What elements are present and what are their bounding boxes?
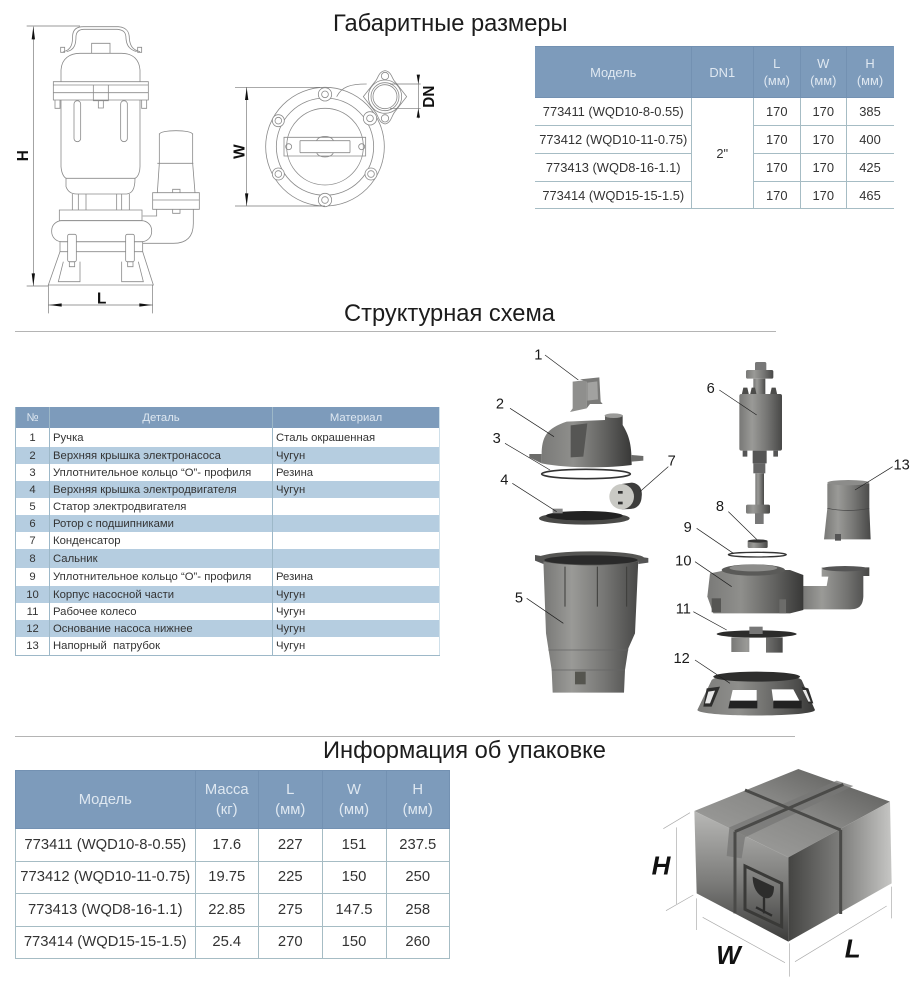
table: packaging information: 270 [278, 934, 303, 950]
table: parts list: Уплотнительное кольцо “О”- профиля [53, 571, 251, 583]
table: packaging information: (мм) [403, 802, 433, 818]
dimension H: H [15, 150, 32, 161]
box labels: W [716, 940, 743, 970]
part 5: stator housing [535, 551, 648, 693]
table: parts list: Резина [276, 571, 313, 583]
handle [63, 27, 140, 52]
table: parts list [15, 407, 440, 656]
discharge elbow [143, 131, 199, 243]
part 10: pump casing with elbow [707, 564, 869, 613]
table: parts list: Корпус насосной части [53, 588, 174, 600]
fragile glass icon [745, 866, 782, 927]
table: overall dimensions: Модель [590, 64, 636, 80]
part 12: lower base [697, 672, 815, 715]
table: overall dimensions: 400 [859, 132, 881, 147]
table: packaging information: Модель [79, 792, 132, 808]
box faces [694, 769, 892, 942]
dimension L: L [97, 290, 106, 307]
table: parts list: 3 [29, 466, 36, 478]
table: overall dimensions: 465 [859, 188, 881, 202]
table: overall dimensions: 170 [766, 132, 788, 147]
part numbers: 6 [707, 381, 715, 397]
box labels: H [652, 851, 672, 881]
table: overall dimensions: (мм) [857, 73, 883, 88]
table: packaging information: 225 [278, 869, 303, 885]
part 7: capacitor [609, 483, 642, 509]
table: packaging information: (мм) [275, 802, 305, 818]
table: packaging information: 227 [278, 837, 303, 853]
table: packaging information: 151 [342, 837, 366, 853]
table: parts list: Чугун [276, 450, 305, 462]
table: packaging information [15, 770, 450, 959]
table: parts list: 6 [29, 518, 36, 530]
dimension DN: DN [421, 86, 438, 108]
motor body [53, 43, 148, 210]
part numbers [493, 348, 910, 667]
table: parts list: Ротор с подшипниками [53, 518, 174, 530]
table: overall dimensions: 170 [812, 104, 834, 119]
table: overall dimensions: H [865, 56, 875, 71]
table: packaging information: 258 [405, 902, 430, 918]
table: packaging information: 237.5 [399, 837, 436, 853]
title: packaging information: Информация об упаковке [323, 738, 606, 764]
table: overall dimensions: 170 [766, 188, 788, 202]
table: packaging information: 260 [405, 934, 430, 950]
packing tape [727, 781, 853, 914]
table: parts list: Напорный патрубок [53, 640, 160, 652]
table: parts list: Чугун [276, 588, 305, 600]
table: overall dimensions: 773411 (WQD10-8-0.55) [543, 104, 684, 119]
table: parts list: Основание насоса нижнее [53, 622, 193, 634]
table: parts list: Уплотнительное кольцо “О”- профиля [53, 466, 251, 478]
table: packaging information: 25.4 [212, 934, 241, 950]
table: parts list: Сталь окрашенная [276, 432, 375, 444]
table: packaging information: 22.85 [208, 902, 245, 918]
box labels [652, 851, 861, 970]
table: overall dimensions: 170 [812, 132, 834, 147]
table: overall dimensions: (мм) [810, 73, 836, 88]
part 4: motor top cover [539, 509, 630, 525]
dimension W: W [232, 144, 249, 159]
table: overall dimensions: 170 [766, 160, 788, 175]
packaging box illustration [652, 769, 892, 977]
table: packaging information: (мм) [339, 802, 369, 818]
table: packaging information: 275 [278, 902, 303, 918]
handle bar [284, 137, 366, 156]
side view pump line drawing [48, 27, 199, 285]
dimension W [232, 87, 325, 206]
box labels: L [845, 933, 861, 963]
table: parts list: 2 [29, 450, 36, 462]
table: parts list: Конденсатор [53, 534, 121, 546]
part numbers: 2 [496, 397, 504, 413]
table: overall dimensions: 385 [859, 104, 881, 119]
part 1: handle [570, 377, 603, 412]
table: overall dimensions: W [817, 56, 829, 71]
table: overall dimensions: DN1 [709, 64, 735, 80]
table: overall dimensions: 773414 (WQD15-15-1.5) [542, 188, 684, 202]
table: overall dimensions: 2" [716, 146, 728, 160]
table: parts list: Статор электродвигателя [53, 500, 186, 512]
part numbers: 1 [534, 348, 542, 364]
table: parts list: Ручка [53, 432, 84, 444]
part 3: O-ring [542, 469, 630, 479]
table: parts list: 8 [29, 552, 36, 564]
table: parts list: № [26, 412, 39, 424]
leader lines [505, 355, 893, 683]
table: parts list: 5 [29, 500, 36, 512]
table: parts list: Верхняя крышка электродвигателя [53, 484, 237, 496]
table: parts list: 9 [29, 571, 36, 583]
part numbers: 4 [500, 473, 508, 489]
part 9: O-ring [728, 552, 786, 557]
part numbers: 10 [675, 553, 691, 569]
table: parts list: Резина [276, 466, 313, 478]
table: parts list: Чугун [276, 606, 305, 618]
top view pump line drawing [266, 71, 407, 207]
table: overall dimensions [535, 46, 894, 209]
dimension H [15, 26, 80, 286]
table: parts list: Чугун [276, 622, 305, 634]
part numbers: 8 [716, 499, 724, 515]
table: overall dimensions: 773413 (WQD8-16-1.1) [546, 160, 681, 175]
part numbers: 5 [515, 591, 523, 607]
exploded view of pump parts [493, 348, 910, 715]
part numbers: 13 [894, 457, 910, 473]
table: parts list: 7 [29, 534, 36, 546]
table: packaging information: Масса [205, 782, 249, 798]
table: packaging information: 773412 (WQD10-11-0.75) [20, 869, 190, 885]
table: overall dimensions: (мм) [764, 73, 790, 88]
dimension L [48, 285, 153, 313]
part 2: top cover [529, 413, 643, 467]
table: parts list: Рабочее колесо [53, 606, 137, 618]
part 8: oil seal [748, 539, 768, 548]
table: packaging information: H [412, 782, 423, 798]
table: parts list: Деталь [142, 412, 180, 424]
table: parts list: Материал [330, 412, 382, 424]
table: overall dimensions: 170 [766, 104, 788, 119]
table: packaging information: 150 [342, 934, 366, 950]
table: packaging information: 19.75 [208, 869, 245, 885]
table: packaging information: 773413 (WQD8-16-1.1) [28, 902, 183, 918]
table: overall dimensions: 170 [812, 188, 834, 202]
table: packaging information: 250 [405, 869, 430, 885]
table: overall dimensions: 170 [812, 160, 834, 175]
table: parts list: Сальник [53, 552, 98, 564]
box dimension lines [663, 813, 892, 977]
table: packaging information: 773414 (WQD15-15-1.5) [24, 934, 187, 950]
table: packaging information: 150 [342, 869, 366, 885]
table: overall dimensions: 425 [859, 160, 881, 175]
table: packaging information: W [347, 782, 361, 798]
part numbers: 9 [684, 520, 692, 536]
discharge flange [363, 71, 407, 124]
pump casing and feet [48, 210, 153, 285]
table: packaging information: 17.6 [212, 837, 241, 853]
part numbers: 12 [674, 651, 690, 667]
table: parts list: 11 [27, 606, 38, 618]
part numbers: 3 [493, 431, 501, 447]
part 11: impeller [717, 627, 797, 653]
table: packaging information: L [286, 782, 294, 798]
dimension DN [390, 75, 438, 118]
table: packaging information: (кг) [216, 802, 238, 818]
table: overall dimensions: L [773, 56, 780, 71]
table: parts list: 1 [29, 432, 36, 444]
table: parts list: 13 [26, 640, 39, 652]
title: structural diagram: Структурная схема [344, 301, 555, 327]
table: packaging information: 147.5 [335, 902, 373, 918]
part 6: rotor with bearings [739, 362, 782, 524]
title: overall dimensions: Габаритные размеры [333, 11, 568, 37]
table: parts list: 4 [29, 484, 36, 496]
part numbers: 7 [668, 453, 676, 469]
table: parts list: Чугун [276, 640, 305, 652]
table: parts list: 12 [26, 622, 39, 634]
part numbers: 11 [676, 602, 691, 618]
table: packaging information: 773411 (WQD10-8-0.55) [24, 837, 186, 853]
table: parts list: 10 [26, 588, 39, 600]
table: parts list: Верхняя крышка электронасоса [53, 450, 221, 462]
part 13: discharge pipe [824, 480, 871, 541]
table: overall dimensions: 773412 (WQD10-11-0.75) [539, 132, 687, 147]
table: parts list: Чугун [276, 484, 305, 496]
